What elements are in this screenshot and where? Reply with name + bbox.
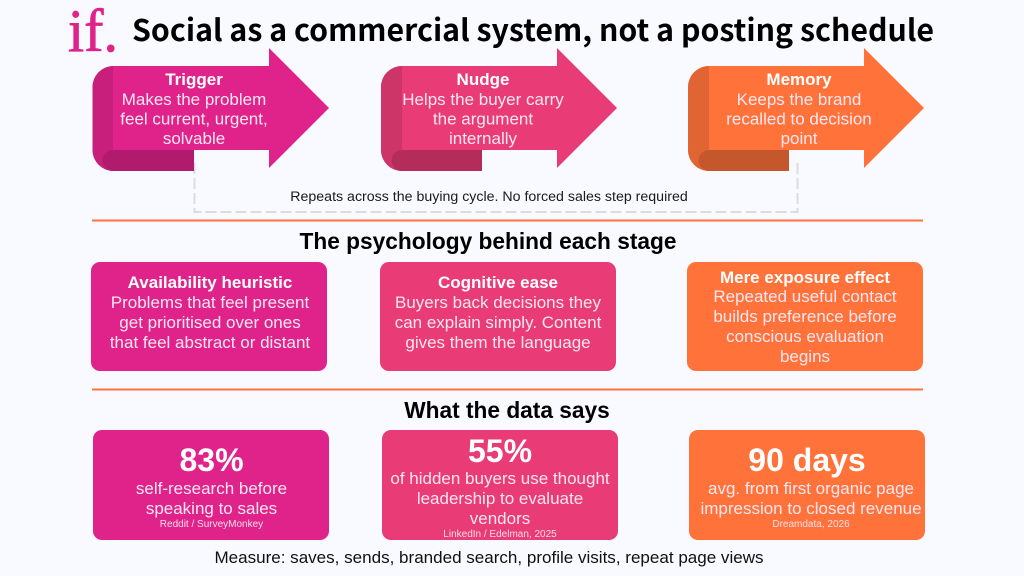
arrow: nudge: Helps the buyer carry [402,90,564,109]
arrow: trigger: Trigger [165,70,223,89]
arrow: memory: point [781,129,818,148]
stat: 55%: LinkedIn / Edelman, 2025 [443,529,557,540]
panel: mere exposure effect [687,262,923,371]
panel: availability heuristic: Availability heuristic [128,273,292,292]
stat: 83%: self-research before [136,479,287,498]
panel: cognitive ease: gives them the language [405,333,591,352]
stat: 55%: vendors [470,509,530,528]
panel: cognitive ease [380,262,616,371]
loop connector [194,162,798,212]
panel: mere exposure effect: Mere exposure effect [720,268,890,287]
arrow: memory: Keeps the brand [737,90,861,109]
stat: 55%: of hidden buyers use thought [390,469,610,488]
panel: cognitive ease: can explain simply. Content [395,313,602,332]
arrow: nudge [381,48,617,171]
arrow: trigger: solvable [163,129,225,148]
stat: 55%: 55% [468,433,532,469]
stat: 90 days: impression to closed revenue [700,499,922,518]
panel: mere exposure effect: conscious evaluation [726,327,884,346]
title: Social as a commercial system, not a posting schedule [132,6,934,50]
arrow: memory: Memory [766,70,832,89]
heading: psychology: The psychology behind each stage [300,228,676,254]
measure line: Measure: saves, sends, branded search, profile visits, repeat page views [214,548,764,567]
stat: 90 days: avg. from first organic page [708,479,914,498]
arrow: nudge: Nudge [457,70,509,89]
loop caption: Repeats across the buying cycle. No forced sales step required [290,189,688,205]
arrow: memory: recalled to decision [726,110,872,128]
stat: 83%: speaking to sales [146,499,277,518]
panel: cognitive ease: Cognitive ease [438,273,558,292]
stat: 83%: 83% [179,442,244,478]
stat: 55% [382,430,618,540]
arrow: trigger: Makes the problem [122,90,266,109]
heading: data: What the data says [404,397,610,423]
panel: availability heuristic: Problems that feel present [111,293,309,312]
arrow: trigger: feel current, urgent, [120,110,268,128]
panel: mere exposure effect: builds preference before [713,307,897,326]
stat: 90 days: Dreamdata, 2026 [772,519,850,530]
arrow: trigger [92,48,329,171]
arrow: memory [688,48,924,171]
panel: availability heuristic [91,262,327,371]
stat: 55%: leadership to evaluate [417,489,583,508]
stat: 83% [93,430,329,540]
arrow: nudge: internally [449,129,518,148]
panel: availability heuristic: get prioritised over ones [119,313,301,332]
arrow: nudge: the argument [433,110,533,128]
panel: availability heuristic: that feel abstract or distant [110,333,310,352]
panel: cognitive ease: Buyers back decisions they [395,293,601,312]
stat: 90 days [689,430,925,540]
stat: 83%: Reddit / SurveyMonkey [160,519,263,530]
panel: mere exposure effect: begins [780,347,830,366]
stat: 90 days: 90 days [748,442,866,478]
panel: mere exposure effect: Repeated useful contact [713,287,897,306]
